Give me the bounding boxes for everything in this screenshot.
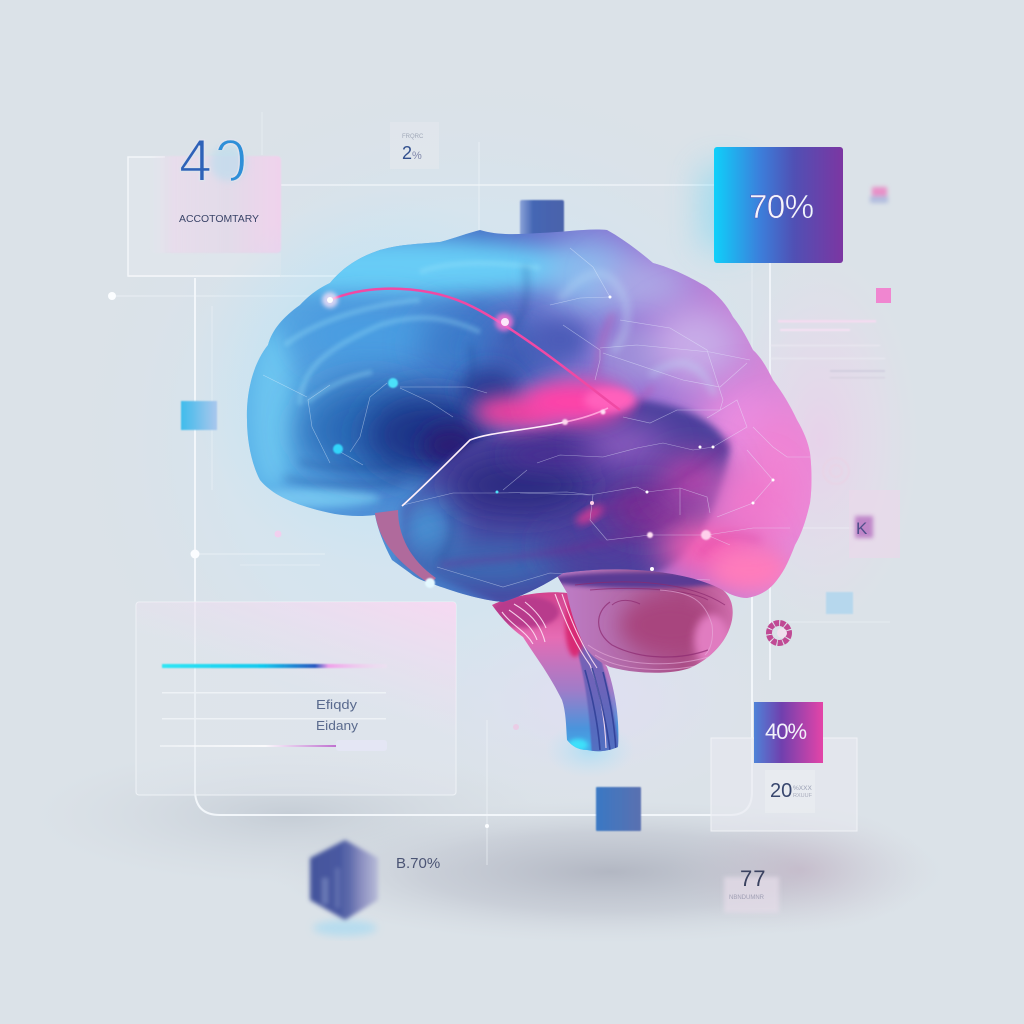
stat card: 40 accomplishment [128, 128, 281, 276]
temporal lobe [400, 400, 730, 605]
small stat: 2 [390, 122, 439, 169]
right lines [770, 320, 885, 378]
icon: pink gear [769, 623, 789, 643]
dot: connector nodes [108, 292, 519, 828]
brain glow [190, 190, 635, 778]
left blue square [181, 401, 217, 430]
card: bottom right glass: %XXX [793, 785, 812, 792]
small stat: 2: FRQRC [402, 134, 424, 140]
label: 7.0%: B.70% [396, 855, 440, 872]
stat card: 70%: 70% [749, 188, 814, 225]
bottom centre square [596, 787, 641, 831]
top square [520, 200, 564, 236]
card: bottom right glass: 20 [770, 780, 792, 802]
panel: bottom left bars: Efiqdy [316, 697, 358, 712]
upper right lobes [545, 239, 635, 311]
brain cerebrum [246, 230, 812, 602]
panel: bottom left bars [136, 602, 456, 795]
card: bottom right glass [711, 738, 857, 831]
stat card: 70% glow [700, 165, 745, 250]
panel: bottom left bars: Eidany [316, 718, 359, 733]
icon: faint target [823, 458, 849, 484]
pink square [876, 288, 891, 303]
mauve temporal rim [375, 510, 436, 584]
glow nodes [322, 292, 774, 588]
navy core [300, 382, 440, 478]
folds dark [285, 265, 527, 560]
card: 77 [724, 866, 779, 913]
neural pathways [330, 289, 620, 506]
folds light [285, 263, 540, 405]
connector lines [112, 112, 890, 865]
stat card: 40 accomplishment: 0 [214, 128, 247, 194]
brainstem [492, 592, 618, 752]
stat card: 40 accomplishment: 4 [179, 128, 212, 194]
small pink icon top right [870, 187, 888, 203]
right pink [703, 383, 787, 467]
stat card: 40%: 40% [765, 719, 806, 744]
upper frontal sky blue [235, 240, 585, 296]
small pale blue square [826, 592, 853, 614]
card: 77: NBNDUMNR [729, 895, 765, 901]
small card right: K [856, 519, 868, 538]
central pink glow [473, 396, 557, 428]
cerebellum [558, 569, 733, 673]
card: bottom right glass: RXUUF [793, 793, 813, 799]
icon: 3D cube [310, 840, 378, 936]
card: 77: 77 [740, 866, 766, 891]
small card right [849, 490, 900, 558]
fine veins [263, 248, 810, 587]
stat card: 40 accomplishment: ACCOTOMTARY [179, 213, 259, 225]
stat card: 70% [714, 147, 843, 263]
small stat: 2: 2% [402, 143, 422, 163]
stat card: 40% [754, 702, 823, 763]
